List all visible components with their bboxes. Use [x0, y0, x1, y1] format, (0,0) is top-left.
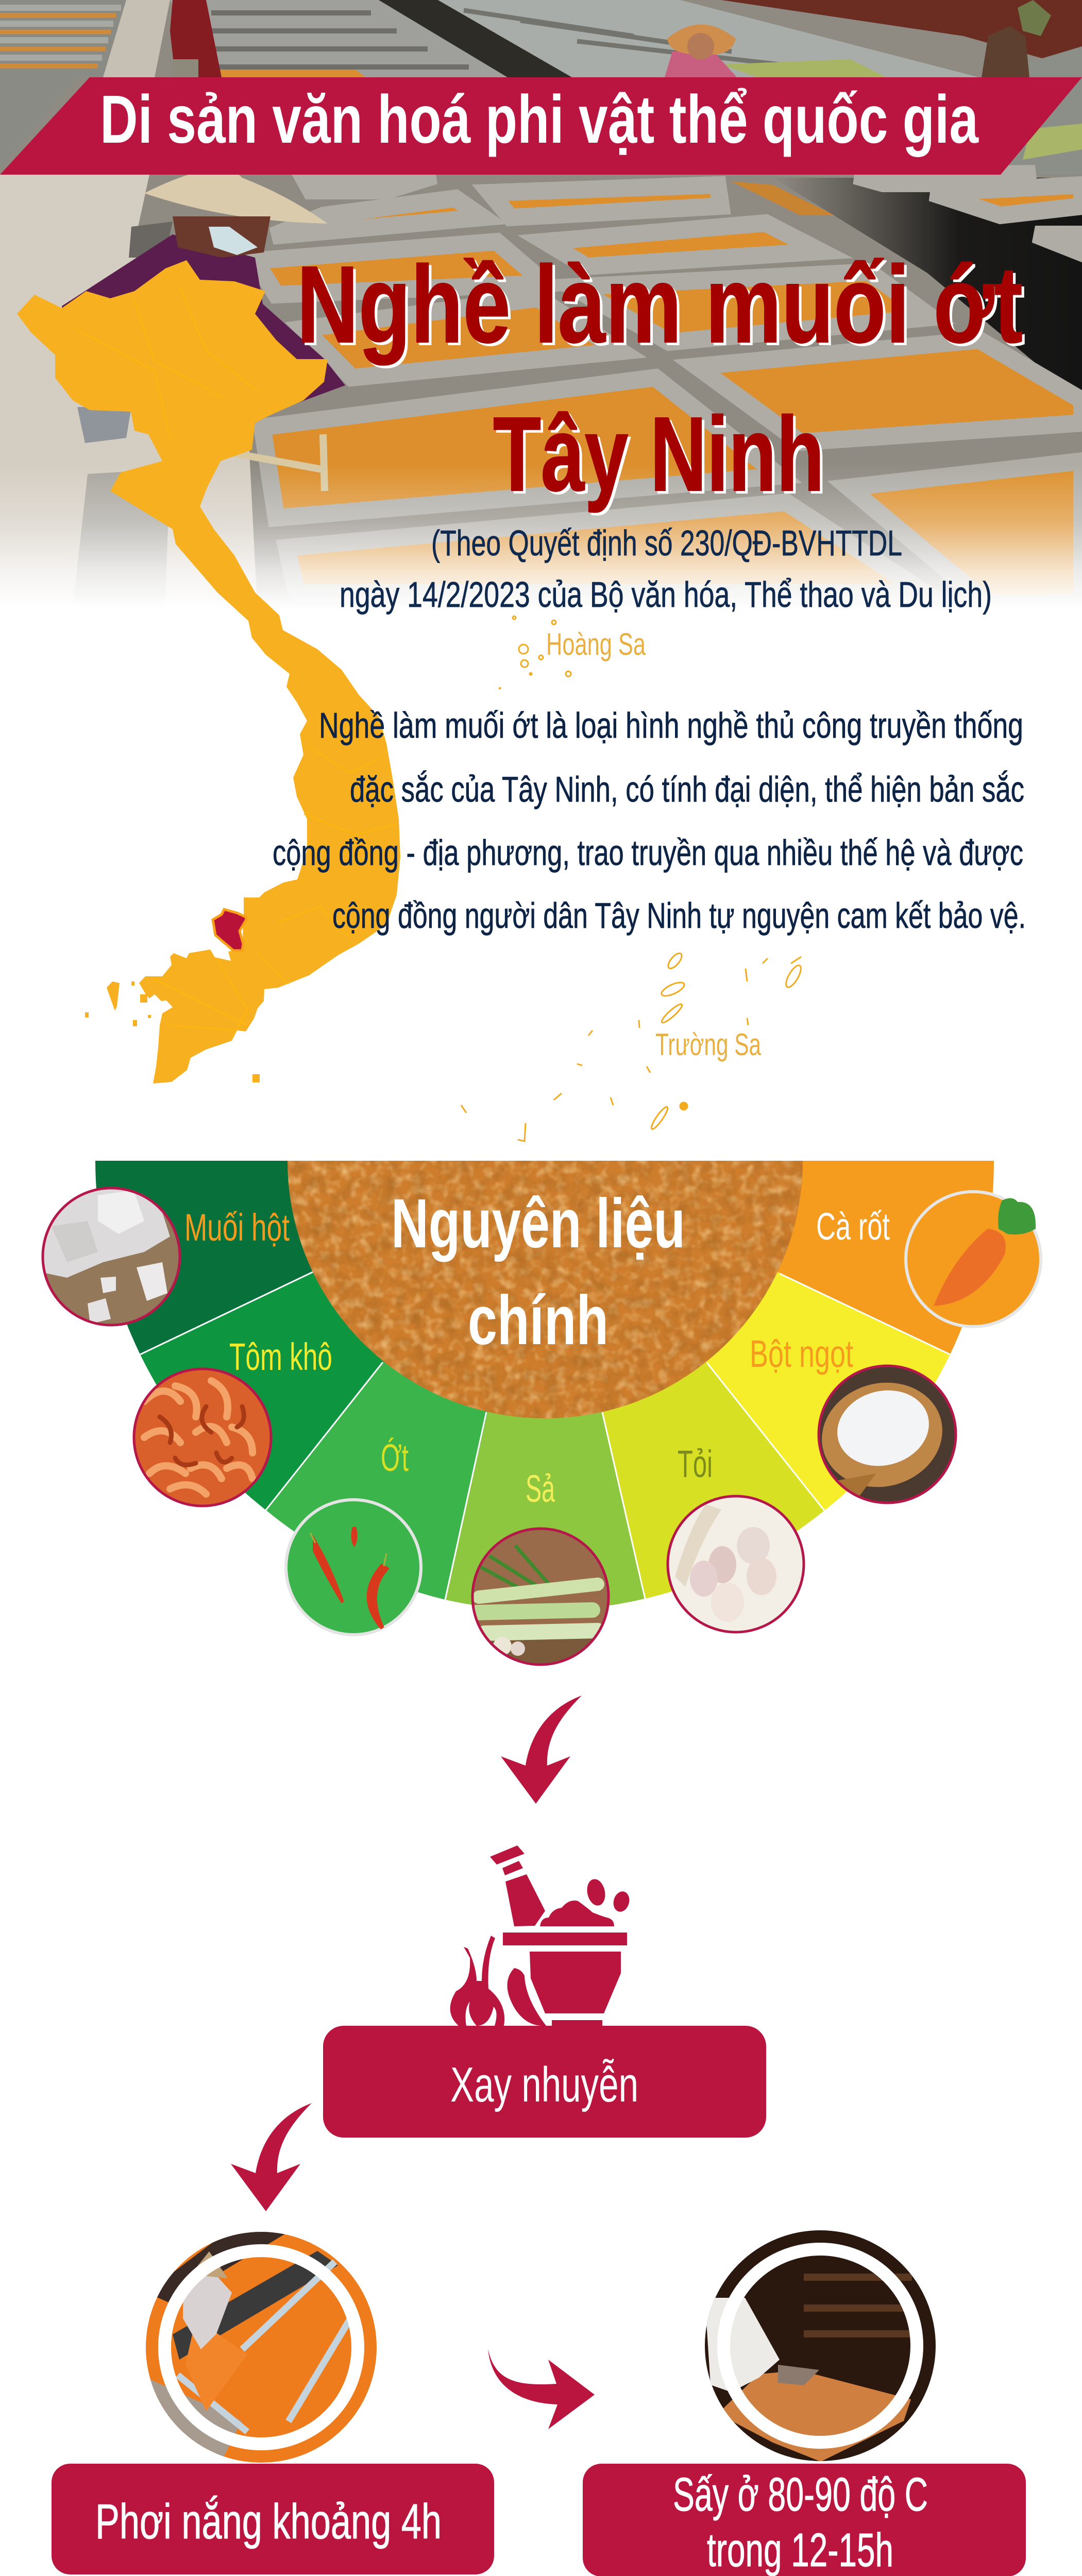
photo: sun drying — [146, 2232, 377, 2463]
step box: Xay nhuyễn — [323, 2026, 766, 2138]
banner — [0, 77, 1082, 175]
ingredient labels: Muối hột — [184, 1206, 290, 1249]
step box: Sấy ở 80-90 độ C trong 12-15h: Sấy ở 80-90 độ C — [673, 2468, 928, 2521]
wedge: Bột ngọt — [545, 1161, 950, 1511]
arrow: sun drying to oven drying — [488, 2349, 595, 2429]
wheel title: Nguyên liệu — [391, 1184, 685, 1262]
arrow: to drying steps — [231, 2103, 312, 2211]
Tây Ninh province highlighted — [213, 909, 246, 951]
ingredient labels: Bột ngọt — [750, 1332, 853, 1375]
arrow: to grinding step — [501, 1696, 582, 1804]
islands: Trường Sa — [461, 951, 804, 1141]
wedge: Tôm khô — [140, 1161, 545, 1510]
photo: MSG in a spoon — [810, 1365, 956, 1503]
icon: carrot — [906, 1192, 1041, 1327]
wedge: Cà rốt — [545, 1161, 994, 1354]
photo: lemongrass — [472, 1528, 609, 1665]
ingredient labels: Tôm khô — [229, 1335, 332, 1378]
ingredient labels: Sả — [526, 1467, 555, 1510]
wedge: Tỏi — [545, 1161, 824, 1599]
step box: Sấy ở 80-90 độ C trong 12-15h — [583, 2464, 1026, 2576]
ingredient labels — [184, 1205, 890, 1510]
ingredient labels: Cà rốt — [816, 1205, 890, 1248]
icon: mortar, pestle and herbs — [450, 1845, 632, 2026]
label: Trường Sa: Trường Sa — [655, 1027, 761, 1062]
main title — [297, 243, 1023, 513]
wedge: Ớt — [266, 1161, 545, 1600]
step box: Sấy ở 80-90 độ C trong 12-15h: trong 12-15h — [707, 2524, 893, 2576]
step box: Xay nhuyễn: Xay nhuyễn — [450, 2057, 638, 2112]
wedge: Muối hột — [95, 1161, 545, 1354]
woman working in the foreground — [62, 169, 345, 491]
photo: garlic — [668, 1495, 804, 1633]
icon: chili peppers — [286, 1500, 421, 1635]
photo: dried shrimp — [134, 1369, 271, 1506]
map of Vietnam — [17, 260, 400, 1083]
wedge: Sả — [445, 1161, 645, 1611]
trays of chili salt — [255, 174, 1082, 603]
decision reference — [340, 523, 992, 615]
step box: Phơi nắng khoảng 4h — [52, 2464, 494, 2574]
label: Hoàng Sa: Hoàng Sa — [546, 627, 646, 662]
Phú Quốc and southern islands — [85, 981, 260, 1082]
photo fade to white — [0, 464, 1082, 609]
province lines — [77, 289, 397, 1038]
hero photo: drying trays — [0, 0, 1082, 613]
ingredient wheel — [95, 1161, 994, 1611]
step box: Phơi nắng khoảng 4h: Phơi nắng khoảng 4h — [95, 2494, 442, 2549]
intro paragraph — [273, 705, 1026, 936]
ingredient labels: Tỏi — [678, 1443, 713, 1485]
wheel title: chính — [468, 1281, 608, 1359]
photo: rock salt — [43, 1188, 180, 1325]
decision reference: (Theo Quyết định số 230/QĐ-BVHTTDL — [431, 523, 902, 563]
islands: Hoàng Sa — [499, 616, 571, 689]
photo: oven drying — [705, 2230, 936, 2462]
centre: chili salt close-up — [288, 1161, 804, 1419]
heap of drying salt — [731, 181, 835, 215]
wheel title — [391, 1184, 685, 1359]
main title: Tây Ninh — [493, 395, 824, 513]
ingredient labels: Ớt — [381, 1436, 409, 1479]
people in the upper photo — [170, 0, 1051, 77]
